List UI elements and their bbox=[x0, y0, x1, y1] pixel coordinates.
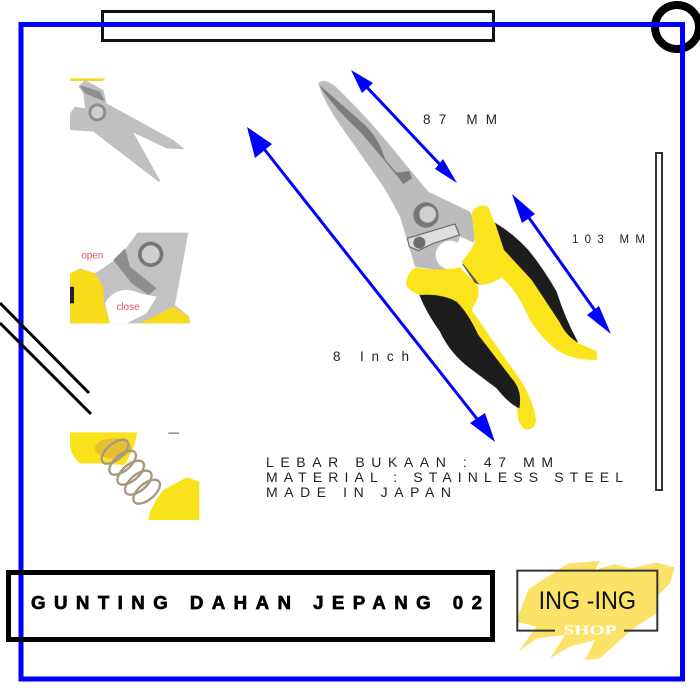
close label: close bbox=[116, 302, 140, 313]
steel body bbox=[70, 233, 190, 323]
rivet bbox=[138, 242, 163, 267]
latch bbox=[113, 248, 157, 295]
label: 103 mm: 1 0 3 M M bbox=[572, 234, 645, 246]
left handle black grip bbox=[419, 295, 520, 408]
black ring, top right bbox=[655, 5, 699, 49]
arrow: 8 inch bbox=[247, 127, 495, 442]
right handle black grip bbox=[495, 223, 578, 343]
grey speck bbox=[168, 432, 179, 434]
logo shop text: SHOP bbox=[563, 623, 617, 638]
label: 8 inch: 8 I n c h bbox=[333, 349, 409, 364]
title text: GUNTING DAHAN JEPANG 02 bbox=[31, 592, 482, 613]
detail photo: blades bbox=[70, 78, 185, 182]
blade dark groove bbox=[319, 85, 412, 184]
black grip bbox=[70, 287, 74, 303]
finger hole bbox=[436, 241, 464, 269]
title box bbox=[8, 572, 492, 640]
detail photo: spring bbox=[70, 432, 199, 520]
logo brush strokes bbox=[516, 561, 675, 660]
specs text block: LEBAR BUKAAN : 47 MM bbox=[266, 454, 553, 470]
left handle yellow bbox=[406, 267, 536, 429]
spring pivot bbox=[462, 263, 482, 285]
open label: open bbox=[81, 251, 103, 262]
yellow handle left bbox=[70, 270, 110, 323]
top empty black box bbox=[102, 12, 494, 40]
label: 87 mm: 8 7 M M bbox=[423, 112, 497, 127]
steel blade bbox=[318, 81, 476, 272]
specs text block: MATERIAL : STAINLESS STEEL bbox=[266, 469, 623, 485]
yellow handle top bbox=[70, 432, 137, 465]
arrow: 103 mm bbox=[512, 194, 611, 334]
yellow handle bottom bbox=[148, 477, 199, 520]
yellow handle sliver bbox=[70, 78, 105, 81]
latch bbox=[407, 224, 459, 251]
spring coils bbox=[98, 435, 164, 508]
handle socket bbox=[95, 438, 132, 458]
right handle yellow bbox=[462, 206, 597, 360]
right vertical bar bbox=[656, 153, 662, 490]
logo frame bbox=[517, 571, 657, 631]
steel blades bbox=[70, 80, 185, 182]
logo: ING-ING shop bbox=[516, 561, 675, 660]
yellow handle right bbox=[140, 307, 190, 323]
latch screw bbox=[413, 237, 425, 249]
arrow: 87 mm bbox=[351, 70, 457, 183]
main scissors photo bbox=[318, 81, 597, 429]
white opening bbox=[105, 290, 157, 323]
specs text block bbox=[266, 454, 623, 500]
latch bbox=[79, 85, 105, 102]
logo wordmark: ING -ING bbox=[539, 587, 636, 615]
specs text block: MADE IN JAPAN bbox=[266, 484, 451, 500]
diagonal decorative lines bbox=[0, 303, 91, 414]
rivet bbox=[88, 103, 106, 121]
pivot rivet bbox=[413, 202, 439, 228]
detail photo: open and close latch bbox=[70, 233, 190, 323]
